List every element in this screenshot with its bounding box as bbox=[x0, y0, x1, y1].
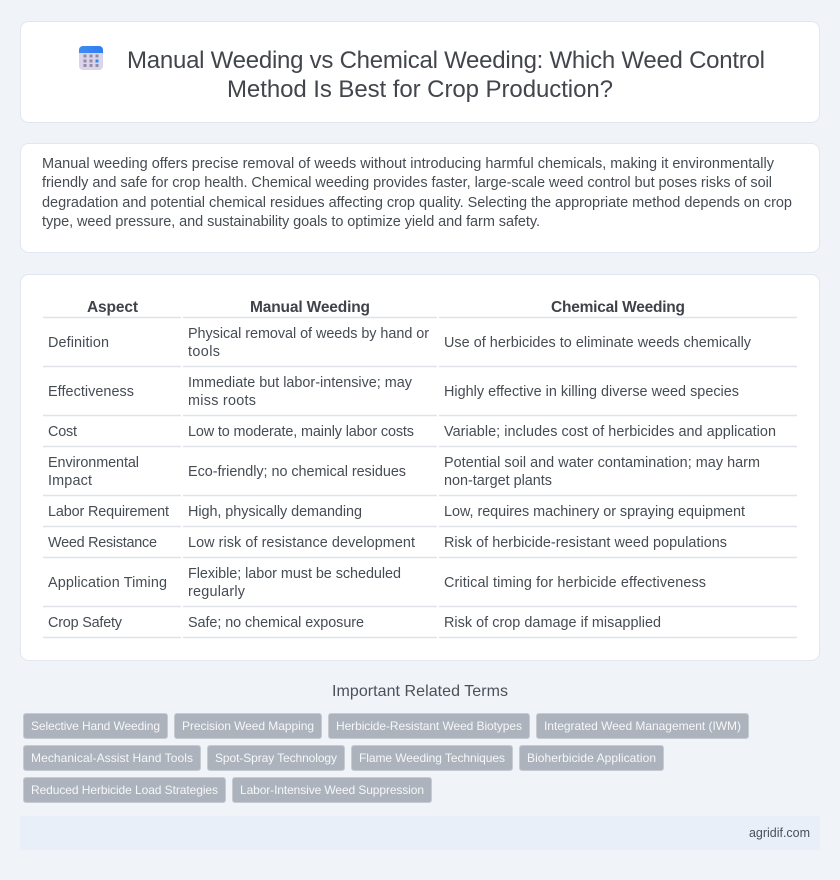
row: environmental impact: Potential soil and water contamination; may harm bbox=[444, 455, 760, 471]
table header bbox=[87, 299, 685, 316]
row: cost: Low to moderate, mainly labor costs bbox=[188, 424, 414, 440]
row: definition: Physical removal of weeds by hand or bbox=[188, 326, 429, 342]
tag bbox=[536, 714, 748, 738]
title bbox=[127, 47, 765, 103]
tag bbox=[208, 746, 344, 770]
tag: Labor-Intensive Weed Suppression bbox=[240, 783, 424, 797]
row: definition: Definition bbox=[48, 335, 109, 351]
panel: description bbox=[20, 144, 820, 252]
tag: Spot-Spray Technology bbox=[215, 751, 337, 765]
text block: summary: friendly and safe for crop health. Chemical weeding provides faster, large-scale weed control but poses risks of soil bbox=[42, 175, 772, 191]
table header: Manual Weeding bbox=[250, 299, 370, 316]
row: cost: Variable; includes cost of herbicides and application bbox=[444, 424, 776, 440]
row: labor requirement bbox=[48, 504, 745, 520]
footer bbox=[20, 816, 820, 850]
row: effectiveness bbox=[48, 375, 739, 409]
row: application timing: Application Timing bbox=[48, 575, 167, 591]
row: crop safety: Safe; no chemical exposure bbox=[188, 615, 364, 631]
row: crop safety: Risk of crop damage if misapplied bbox=[444, 615, 661, 631]
text block: summary: Manual weeding offers precise removal of weeds without introducing harmful chemicals, making it environmentally bbox=[42, 156, 775, 172]
row: environmental impact: Impact bbox=[48, 473, 92, 489]
row: crop safety bbox=[48, 615, 661, 631]
tag: Flame Weeding Techniques bbox=[359, 751, 505, 765]
row: environmental impact: Environmental bbox=[48, 455, 139, 471]
tag: Reduced Herbicide Load Strategies bbox=[31, 783, 218, 797]
tag: Herbicide-Resistant Weed Biotypes bbox=[336, 719, 522, 733]
row: application timing: Flexible; labor must be scheduled bbox=[188, 566, 401, 582]
text block: summary bbox=[42, 156, 792, 230]
row: weed resistance: Weed Resistance bbox=[48, 535, 157, 551]
row: definition: tools bbox=[188, 344, 220, 360]
tag bbox=[174, 714, 322, 738]
tag bbox=[328, 714, 530, 738]
row: weed resistance bbox=[48, 535, 727, 551]
tag: Mechanical-Assist Hand Tools bbox=[31, 751, 193, 765]
tag bbox=[24, 778, 226, 802]
tag: Selective Hand Weeding bbox=[31, 719, 160, 733]
table header: Aspect bbox=[87, 299, 138, 316]
text block: summary: degradation and potential chemical residues affecting crop quality. Selecting the appropriate method depends on crop bbox=[42, 195, 792, 211]
panel: related term tags bbox=[24, 714, 748, 802]
row: application timing: regularly bbox=[188, 584, 246, 600]
tag: Precision Weed Mapping bbox=[182, 719, 314, 733]
row: labor requirement: Labor Requirement bbox=[48, 504, 169, 520]
table header: Chemical Weeding bbox=[551, 299, 685, 316]
row: environmental impact: Eco-friendly; no chemical residues bbox=[188, 464, 406, 480]
tag: Bioherbicide Application bbox=[527, 751, 656, 765]
row: definition bbox=[48, 326, 752, 360]
tag bbox=[352, 746, 512, 770]
row: application timing bbox=[48, 566, 706, 600]
row: crop safety: Crop Safety bbox=[48, 615, 123, 631]
row: environmental impact: non-target plants bbox=[444, 473, 552, 489]
row: effectiveness: Effectiveness bbox=[48, 384, 134, 400]
panel: comparison table bbox=[20, 274, 820, 660]
row: cost bbox=[48, 424, 776, 440]
row: effectiveness: Highly effective in killing diverse weed species bbox=[444, 384, 739, 400]
row: cost: Cost bbox=[48, 424, 77, 440]
title: Manual Weeding vs Chemical Weeding: Which Weed Control bbox=[127, 47, 765, 74]
footer: agridif.com bbox=[749, 826, 810, 840]
row: effectiveness: miss roots bbox=[188, 393, 256, 409]
tag bbox=[520, 746, 664, 770]
panel: title card bbox=[20, 22, 820, 122]
icon: calendar bbox=[79, 46, 103, 70]
row: weed resistance: Risk of herbicide-resistant weed populations bbox=[444, 535, 727, 551]
text block: summary: type, weed pressure, and sustainability goals to optimize yield and farm safety. bbox=[42, 214, 540, 230]
tag bbox=[24, 714, 168, 738]
tag bbox=[24, 746, 200, 770]
row: environmental impact bbox=[48, 455, 760, 489]
row: labor requirement: Low, requires machinery or spraying equipment bbox=[444, 504, 745, 520]
tag: Integrated Weed Management (IWM) bbox=[544, 719, 741, 733]
row: effectiveness: Immediate but labor-intensive; may bbox=[188, 375, 413, 391]
heading: related terms: Important Related Terms bbox=[332, 683, 508, 700]
row: definition: Use of herbicides to eliminate weeds chemically bbox=[444, 335, 752, 351]
row: weed resistance: Low risk of resistance development bbox=[188, 535, 415, 551]
row: application timing: Critical timing for herbicide effectiveness bbox=[444, 575, 706, 591]
row: labor requirement: High, physically demanding bbox=[188, 504, 362, 520]
tag bbox=[232, 778, 432, 802]
title: Method Is Best for Crop Production? bbox=[227, 76, 613, 103]
